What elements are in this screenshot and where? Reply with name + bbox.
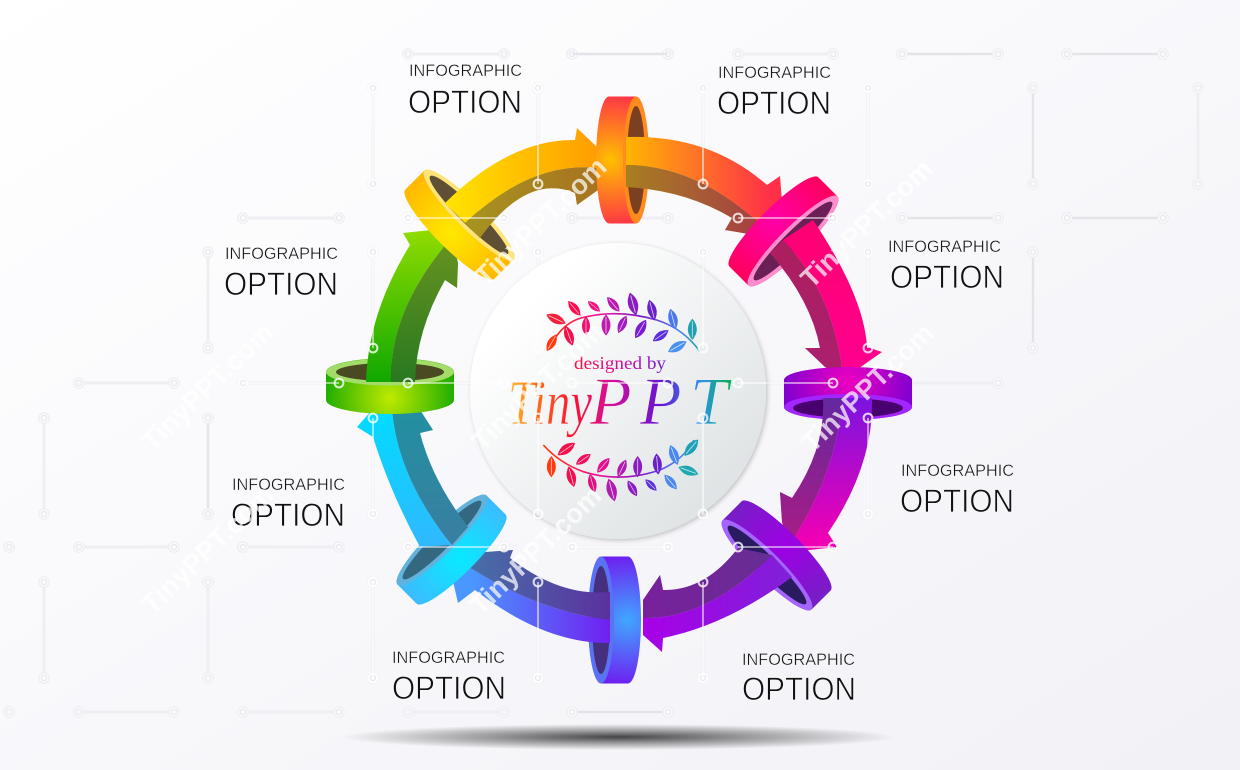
ring: pink — [720, 168, 847, 295]
logo text: Tiny PPT — [508, 363, 732, 439]
ring: red-orange — [596, 96, 649, 224]
laurel top and bottom — [543, 291, 702, 503]
option label: right upper: OPTION — [890, 259, 1004, 295]
arrow: cyan — [357, 410, 468, 547]
watermarks: TinyPPT.com — [795, 317, 939, 458]
option label: bottom right: OPTION — [742, 671, 856, 707]
center disc — [470, 243, 766, 539]
option label: top right: OPTION — [717, 85, 831, 121]
watermarks: TinyPPT.com — [465, 316, 609, 457]
arrow: violet — [643, 548, 792, 652]
arrow: bottom ring to blue ring (start) and bottom ring — [447, 550, 641, 684]
watermarks: TinyPPT.com — [794, 153, 938, 294]
option label: left lower: OPTION — [231, 497, 345, 533]
watermarks — [135, 151, 939, 621]
option label: right lower — [900, 462, 1014, 519]
option label: right lower: INFOGRAPHIC — [901, 462, 1014, 480]
arrow: violet-blue — [447, 550, 610, 643]
option label: left lower — [231, 476, 345, 533]
option label: bottom right: INFOGRAPHIC — [742, 651, 855, 669]
option label: top left: OPTION — [408, 84, 522, 120]
overlay connector grid across artwork — [243, 88, 868, 678]
ring: purple — [784, 367, 912, 420]
option label: top right — [717, 64, 831, 121]
arrow: magenta — [770, 220, 882, 378]
option label: bottom left — [392, 649, 506, 706]
logo text: Tiny PPT: Tiny — [508, 367, 592, 438]
arrow: orange-red — [626, 137, 785, 240]
watermarks: TinyPPT.com — [135, 316, 279, 457]
ring: yellow — [396, 161, 523, 288]
option label: right upper — [888, 238, 1004, 295]
option label: left upper: OPTION — [224, 266, 338, 302]
watermarks: TinyPPT.com — [468, 151, 612, 292]
option label: right lower: OPTION — [900, 483, 1014, 519]
ring: bottom violet-blue — [588, 556, 641, 684]
option label: left lower: INFOGRAPHIC — [232, 476, 345, 494]
watermarks: TinyPPT.com — [135, 479, 279, 620]
option label: top left: INFOGRAPHIC — [409, 62, 522, 80]
ring: violet — [713, 492, 840, 619]
option label: bottom left: OPTION — [392, 670, 506, 706]
option label: left upper — [224, 245, 338, 302]
option label: top left — [408, 62, 522, 120]
watermarks: TinyPPT.com — [463, 480, 607, 621]
floor shadow — [340, 724, 896, 750]
option label: right upper: INFOGRAPHIC — [888, 238, 1001, 256]
ring: green — [326, 358, 454, 414]
arrow: green — [366, 228, 458, 382]
ring: blue — [388, 486, 515, 613]
option label: top right: INFOGRAPHIC — [718, 64, 831, 82]
logo text: designed by: designed by — [574, 353, 666, 373]
logo text: Tiny PPT: PPT — [589, 363, 732, 439]
option label: bottom left: INFOGRAPHIC — [392, 649, 505, 667]
option label: left upper: INFOGRAPHIC — [225, 245, 338, 263]
arrow: yellow — [445, 128, 605, 238]
arrow: purple-magenta — [780, 398, 872, 552]
option label: bottom right — [742, 651, 856, 707]
